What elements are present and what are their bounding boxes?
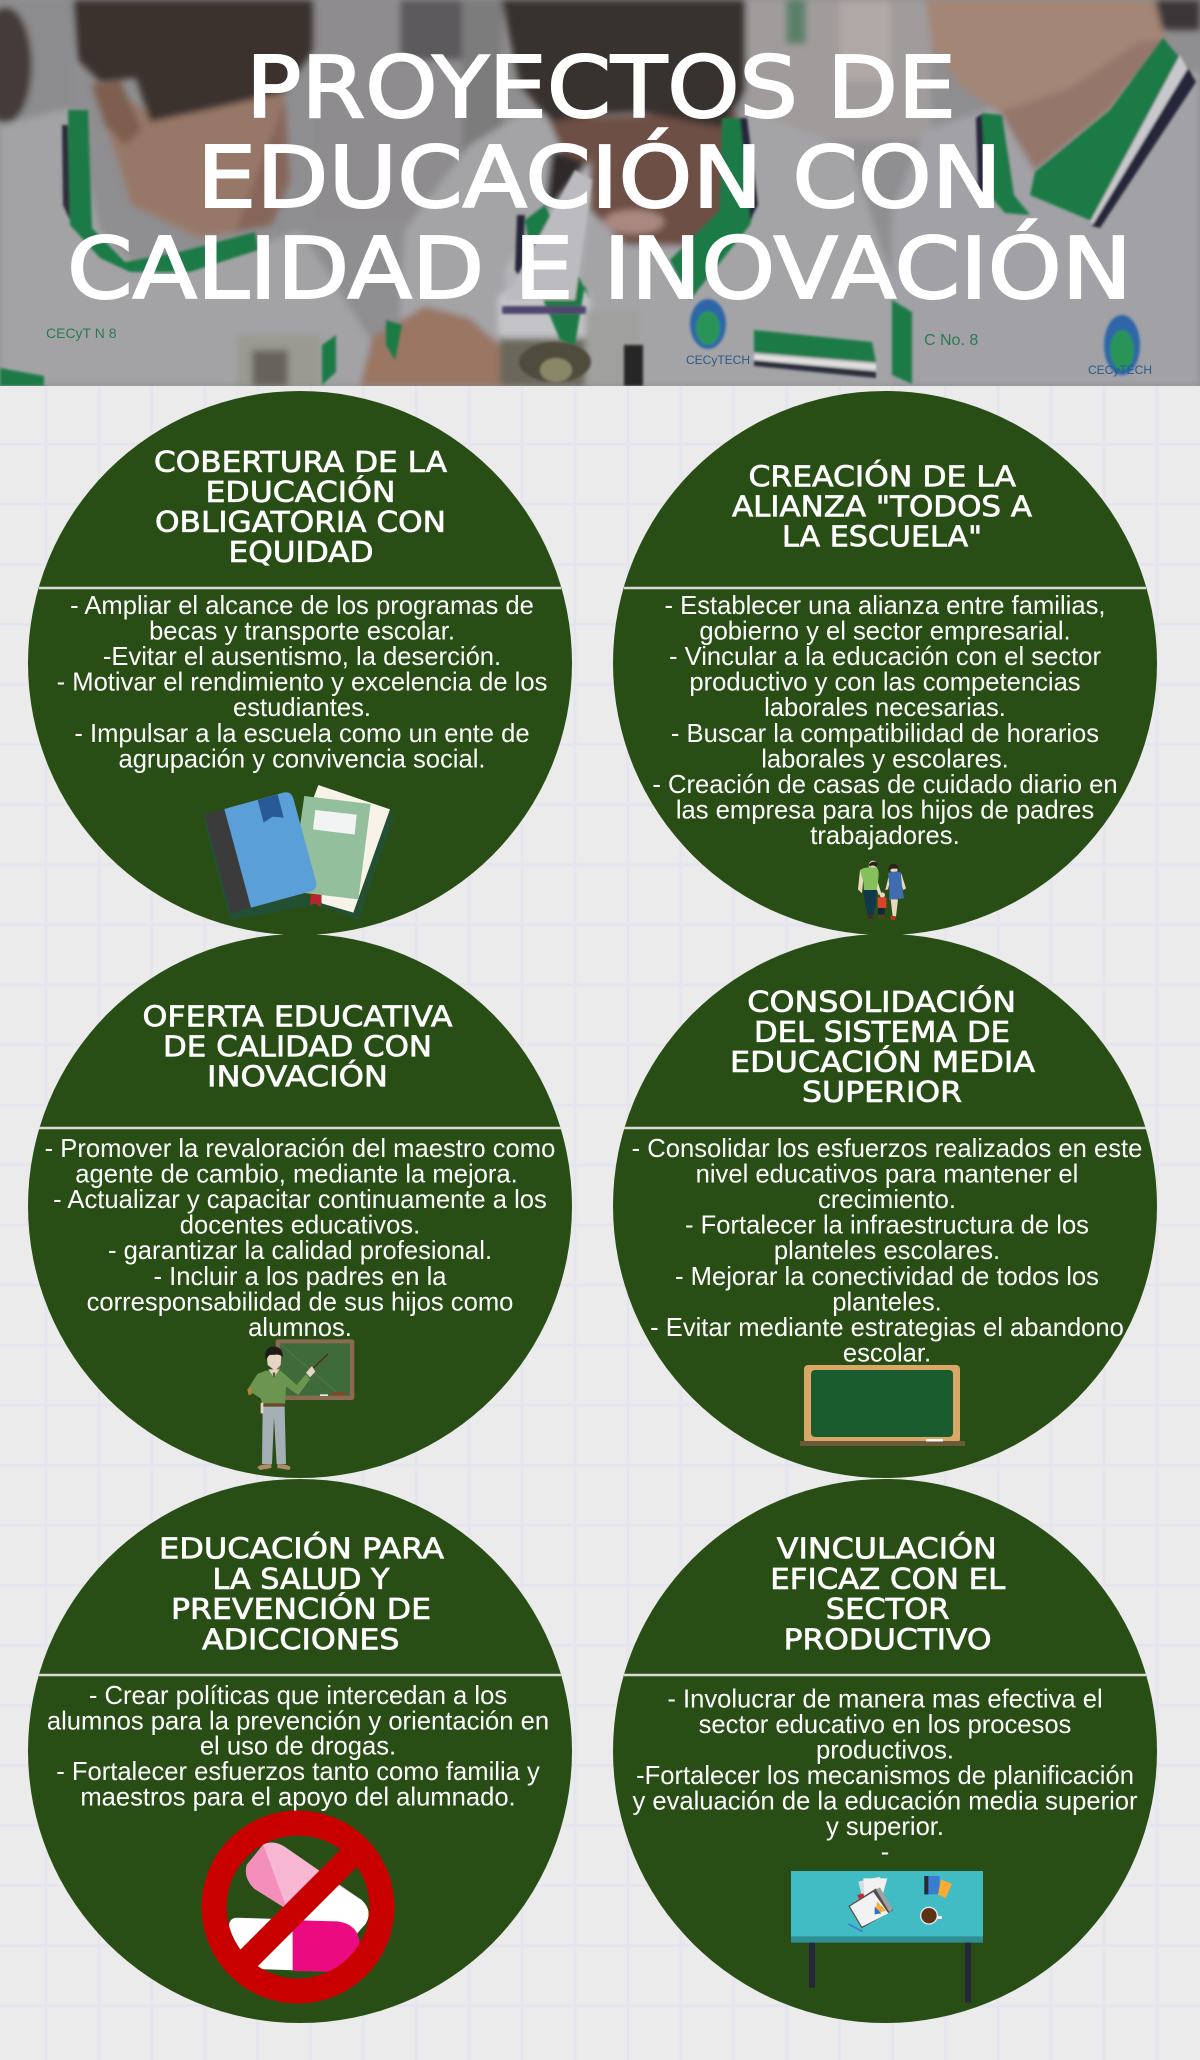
body text: oferta: corresponsabilidad de sus hijos como <box>87 1288 513 1316</box>
body text: salud: maestros para el apoyo del alumnado. <box>80 1784 516 1812</box>
panel: oferta educativa <box>28 934 572 1478</box>
body text: salud: el uso de drogas. <box>200 1733 396 1761</box>
heading: cobertura <box>154 446 448 569</box>
heading: consolidación: EDUCACIÓN MEDIA <box>730 1045 1036 1079</box>
heading: consolidación: CONSOLIDACIÓN <box>747 985 1016 1019</box>
body text: cobertura: - Motivar el rendimiento y excelencia de los <box>57 669 547 697</box>
photo logo text: C No. 8 <box>924 332 978 349</box>
body text: oferta: - Actualizar y capacitar continuamente a los <box>53 1186 547 1214</box>
header photo: students at a microscope <box>0 0 1200 386</box>
heading: alianza: CREACIÓN DE LA <box>748 459 1017 493</box>
body text: cobertura <box>57 592 547 773</box>
heading: vinculación <box>770 1531 1005 1656</box>
body text: oferta: - Incluir a los padres en la <box>153 1263 447 1291</box>
body text: salud: alumnos para la prevención y orientación en <box>47 1707 549 1735</box>
body text: vinculación: sector educativo en los procesos <box>699 1711 1071 1739</box>
panel: educación para la salud <box>28 1479 572 2023</box>
body text: vinculación: -Fortalecer los mecanismos de planificación <box>636 1762 1134 1790</box>
heading: cobertura: EDUCACIÓN <box>206 475 396 509</box>
body text: cobertura: - Impulsar a la escuela como un ente de <box>74 720 530 748</box>
boy 2 collar <box>670 118 757 300</box>
body text: alianza: laborales y escolares. <box>761 745 1009 773</box>
body text: oferta: - garantizar la calidad profesional. <box>108 1237 492 1265</box>
eyepiece <box>542 152 587 210</box>
body text: alianza: - Establecer una alianza entre familias, <box>664 592 1106 620</box>
body text: consolidación: planteles escolares. <box>774 1237 1000 1265</box>
title <box>67 39 1132 319</box>
body text: oferta: alumnos. <box>248 1314 352 1342</box>
body text: vinculación: y superior. <box>826 1813 944 1841</box>
boy 1 face <box>107 92 287 240</box>
body text: consolidación: - Mejorar la conectividad de todos los <box>675 1263 1099 1291</box>
heading: oferta <box>142 1000 453 1093</box>
body text: consolidación: escolar. <box>843 1339 931 1367</box>
body text: vinculación: - Involucrar de manera mas efectiva el <box>667 1686 1103 1714</box>
heading: salud: ADICCIONES <box>202 1623 400 1656</box>
heading: vinculación: VINCULACIÓN <box>777 1531 997 1565</box>
title: PROYECTOS DE <box>246 39 956 138</box>
body text: alianza: productivo y con las competencias <box>689 669 1081 697</box>
photo logo text <box>46 325 1152 377</box>
body text: cobertura: - Ampliar el alcance de los programas de <box>70 592 534 620</box>
heading: vinculación: SECTOR <box>826 1593 949 1626</box>
body text: salud: - Fortalecer esfuerzos tanto como familia y <box>56 1758 540 1786</box>
icon: teacher at blackboard <box>247 1339 354 1470</box>
heading: salud: LA SALUD Y <box>212 1563 390 1596</box>
body text: cobertura: estudiantes. <box>233 694 371 722</box>
ring and black knob <box>502 306 586 314</box>
body text: vinculación <box>632 1686 1138 1866</box>
boy 2 face <box>548 112 738 246</box>
heading: consolidación <box>730 985 1036 1109</box>
body text: alianza: gobierno y el sector empresarial. <box>699 618 1071 646</box>
icon: family <box>858 861 906 920</box>
heading: vinculación: EFICAZ CON EL <box>770 1563 1005 1596</box>
body text: cobertura: agrupación y convivencia social. <box>118 745 486 773</box>
heading: oferta: INOVACIÓN <box>207 1059 388 1093</box>
body text: alianza <box>652 592 1118 850</box>
heading: cobertura: OBLIGATORIA CON <box>155 506 446 539</box>
heading: vinculación: PRODUCTIVO <box>784 1623 992 1656</box>
body text: consolidación: planteles. <box>832 1288 942 1316</box>
backdrop between the students <box>309 0 316 54</box>
body text: oferta: - Promover la revaloración del maestro como <box>45 1135 555 1163</box>
body text: alianza: trabajadores. <box>810 822 960 850</box>
icon: desk with documents <box>791 1871 983 2003</box>
heading: consolidación: SUPERIOR <box>802 1076 962 1109</box>
boy 3 collar <box>982 113 1030 215</box>
boy 1 hair <box>73 0 314 122</box>
title: EDUCACIÓN CON <box>197 127 1002 228</box>
heading: oferta: OFERTA EDUCATIVA <box>142 1000 453 1033</box>
icon: chalkboard <box>800 1365 965 1446</box>
icon: no drugs sign <box>214 1823 382 1991</box>
body text: cobertura: -Evitar el ausentismo, la deserción. <box>103 643 501 671</box>
microscope body <box>505 160 590 300</box>
body text: consolidación: - Consolidar los esfuerzos realizados en este <box>632 1135 1142 1163</box>
body text: vinculación: - <box>881 1838 889 1866</box>
panel: consolidación del sistema <box>613 934 1157 1478</box>
body text: vinculación: productivos. <box>816 1736 954 1764</box>
panel: cobertura de la educación obligatoria <box>28 391 572 935</box>
heading: salud <box>159 1531 445 1656</box>
shirts <box>0 108 400 386</box>
heading: salud: EDUCACIÓN PARA <box>159 1531 445 1565</box>
body text: oferta: docentes educativos. <box>180 1212 420 1240</box>
photo logo text: CECyTECH <box>1088 363 1152 377</box>
body text: consolidación: - Evitar mediante estrategias el abandono <box>650 1314 1124 1342</box>
body text: consolidación: - Fortalecer la infraestructura de los <box>685 1212 1089 1240</box>
heading: alianza <box>732 459 1033 553</box>
body text: consolidación <box>632 1135 1142 1367</box>
heading: cobertura: EQUIDAD <box>228 536 374 569</box>
heading: alianza: ALIANZA "TODOS A <box>732 490 1033 523</box>
panel: creación de la alianza <box>613 391 1157 935</box>
shirt logos <box>690 299 726 349</box>
heading: cobertura: COBERTURA DE LA <box>154 446 448 479</box>
body text: consolidación: nivel educativos para mantener el <box>696 1161 1078 1189</box>
heading: oferta: DE CALIDAD CON <box>163 1030 432 1063</box>
boy 2 hair <box>501 0 746 128</box>
photo logo text: CECyT N 8 <box>46 325 117 341</box>
body text: salud: - Crear políticas que intercedan a los <box>89 1682 507 1710</box>
hand <box>360 306 510 386</box>
body text: alianza: - Vincular a la educación con el sector <box>669 643 1101 671</box>
body text: alianza: - Buscar la compatibilidad de horarios <box>671 720 1099 748</box>
body text: oferta: agente de cambio, mediante la mejora. <box>75 1161 518 1189</box>
panel: vinculación con el sector productivo <box>613 1479 1157 2023</box>
body text: alianza: laborales necesarias. <box>764 694 1006 722</box>
cuffs <box>754 330 876 362</box>
body text: oferta <box>45 1135 555 1342</box>
body text: alianza: las empresa para los hijos de padres <box>676 796 1094 824</box>
title: CALIDAD E INOVACIÓN <box>67 218 1132 319</box>
body text: vinculación: y evaluación de la educación media superior <box>632 1787 1138 1815</box>
body text: alianza: - Creación de casas de cuidado diario en <box>652 771 1118 799</box>
white tube over collar <box>505 170 592 300</box>
icon: books <box>203 785 394 921</box>
photo logo text: CECyTECH <box>686 353 750 367</box>
body text: cobertura: becas y transporte escolar. <box>149 618 455 646</box>
heading: alianza: LA ESCUELA" <box>782 520 982 553</box>
body text: salud <box>47 1682 549 1812</box>
heading: salud: PREVENCIÓN DE <box>171 1592 431 1626</box>
boy 3 face and neck <box>924 0 1168 114</box>
heading: consolidación: DEL SISTEMA DE <box>754 1016 1010 1049</box>
boy 1 collar <box>68 110 258 272</box>
body text: consolidación: crecimiento. <box>818 1186 956 1214</box>
